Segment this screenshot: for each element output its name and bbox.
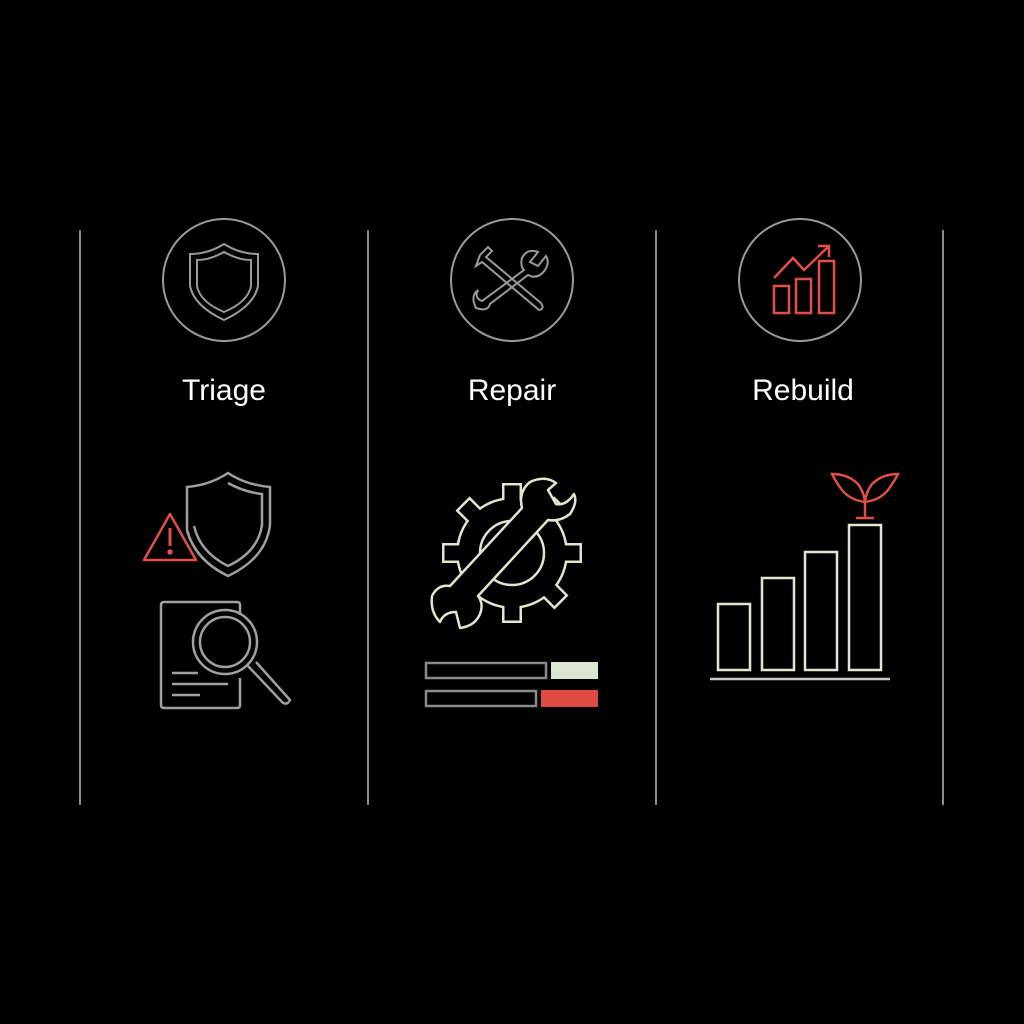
icon: tools circle [451,219,573,341]
heading: Repair: Repair [468,374,556,407]
heading: Triage: Triage [182,374,266,407]
bars: progress [426,662,598,707]
panel: triage [144,219,290,708]
icon: shield circle [163,219,285,341]
icon: shield with warning [144,473,270,576]
chart: growth bars with plant [710,474,898,679]
icon: gear with wrench [432,479,582,628]
panel: repair [426,219,598,707]
heading: Rebuild: Rebuild [752,374,854,407]
icon: chart circle [739,219,861,341]
icon: document with magnifier [161,602,290,708]
panel: rebuild [710,219,898,679]
